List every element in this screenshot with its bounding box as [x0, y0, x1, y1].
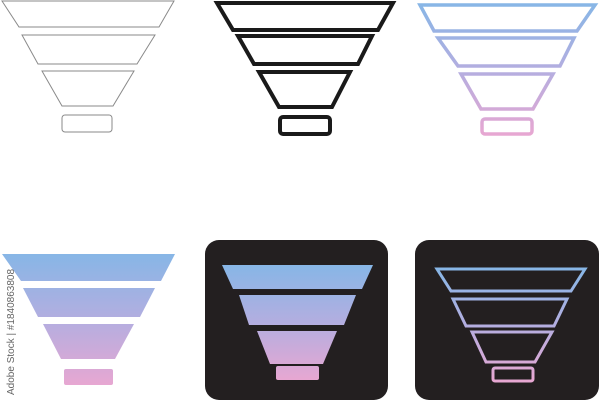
icon: gradient outline funnel: [420, 5, 595, 134]
icon: dark tile with filled gradient funnel: [205, 240, 388, 400]
icon: dark tile with outline gradient funnel: [415, 240, 599, 400]
icon: gradient filled funnel: [2, 254, 175, 385]
watermark text: Adobe Stock | #1840863808: [6, 269, 17, 395]
icon: bold black outline funnel: [217, 3, 393, 134]
icon: thin gray outline funnel: [2, 1, 174, 132]
